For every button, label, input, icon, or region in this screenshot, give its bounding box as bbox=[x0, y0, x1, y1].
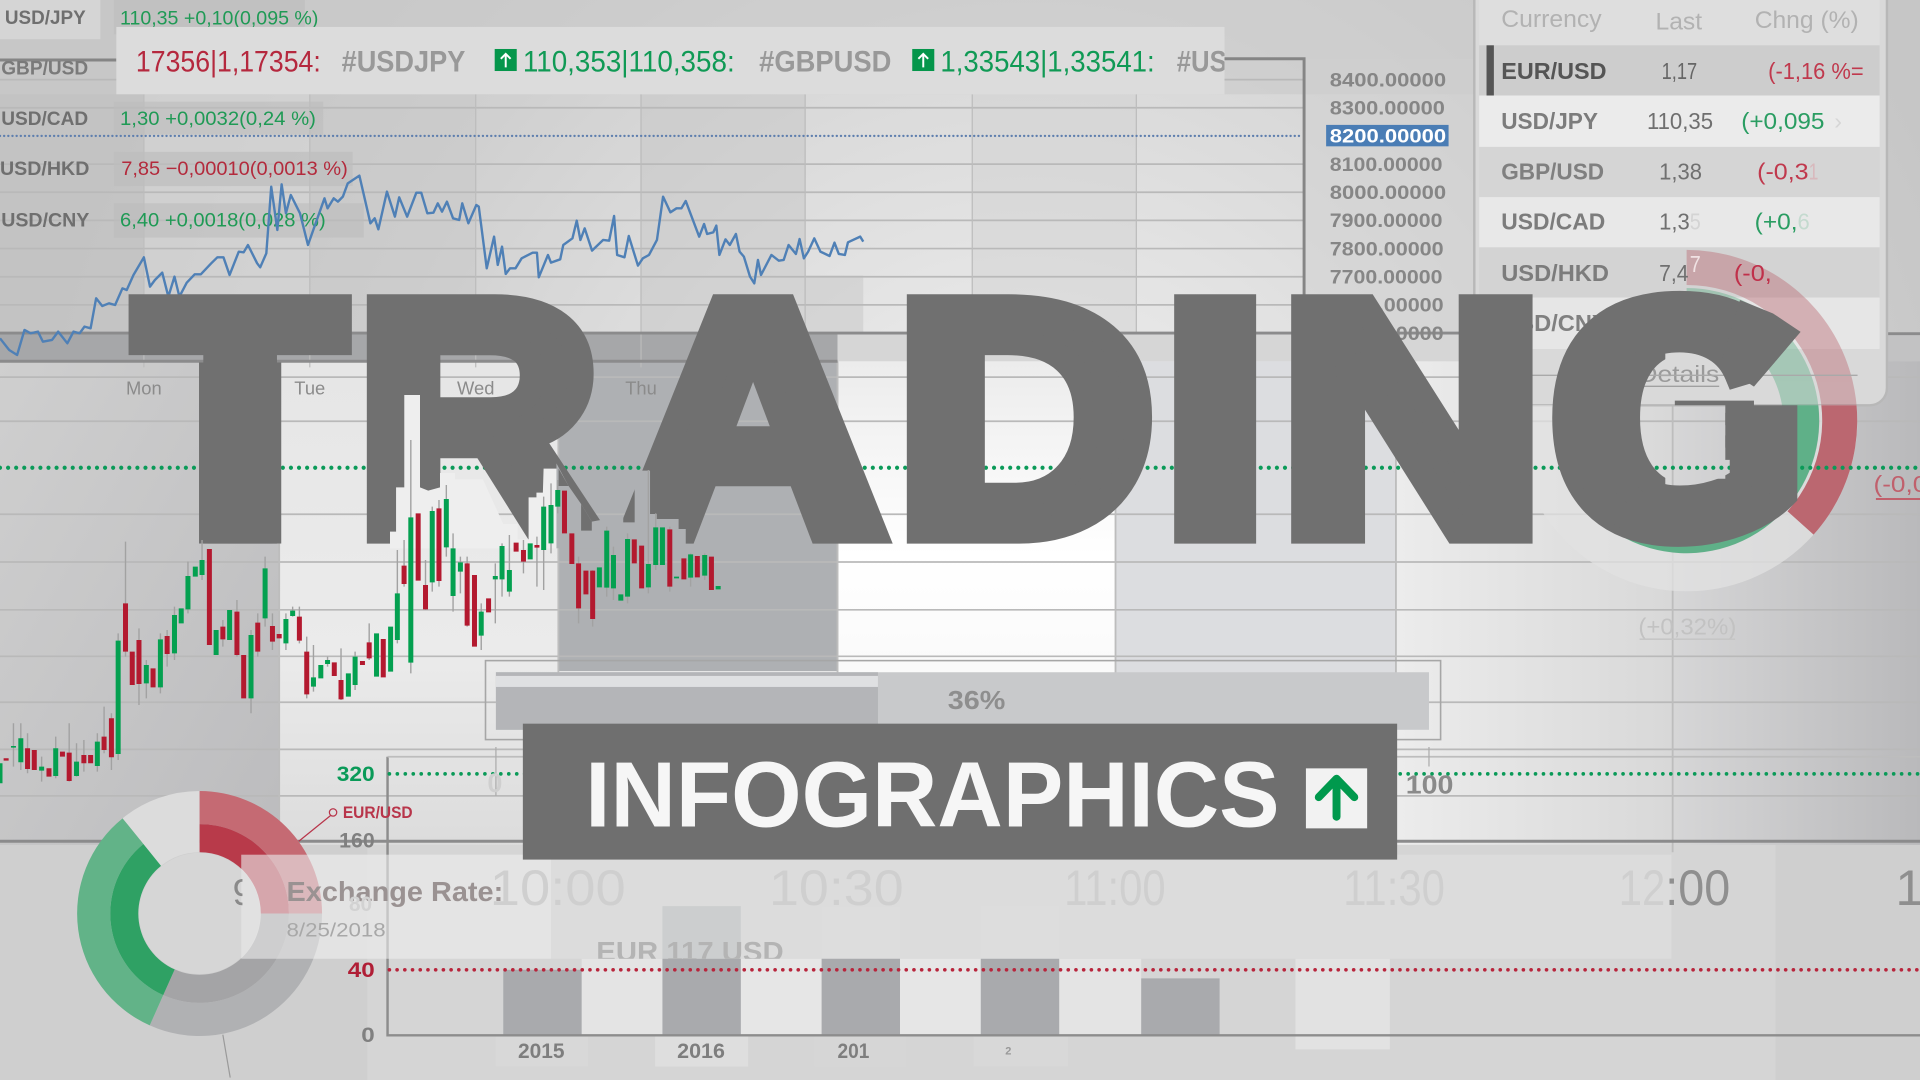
ticker strip: #USDJPY bbox=[342, 46, 466, 79]
title: TRADING: G bbox=[1551, 236, 1805, 601]
left donut chart bbox=[77, 791, 322, 1078]
ticker strip: 17356|1,17354: bbox=[136, 46, 321, 79]
currency rows left: USD/JPY bbox=[5, 7, 86, 29]
bar chart: 201 bbox=[838, 1040, 869, 1063]
subtitle banner: INFOGRAPHICS bbox=[523, 724, 1397, 860]
donut callout: EUR/USD: EUR/USD bbox=[343, 803, 413, 822]
blue price line chart bbox=[0, 176, 863, 355]
currency table text: EUR/USD bbox=[1501, 58, 1607, 84]
currency table text: 7,4 bbox=[1659, 260, 1689, 286]
currency table text: 7 bbox=[1690, 251, 1701, 277]
progress bar: 36% bbox=[948, 687, 1005, 715]
currency rows left: 6,40 +0,0018(0,028 %) bbox=[120, 210, 326, 232]
currency rows left: 7,85 −0,00010(0,0013 %) bbox=[121, 158, 348, 180]
currency rows left: USD/CAD bbox=[1, 108, 88, 130]
currency table text: (+0,095 bbox=[1741, 108, 1824, 134]
price axis labels: 8100.00000 bbox=[1330, 154, 1443, 176]
candle halo cut-out bbox=[390, 395, 686, 548]
donut part below the table panel bbox=[1532, 405, 1858, 591]
currency rows left: USD/CNY bbox=[1, 210, 89, 232]
ticker strip: #USD bbox=[1177, 46, 1245, 79]
y axis labels bbox=[337, 763, 1453, 1047]
chart axes bbox=[388, 747, 1920, 1035]
title: TRADING: G bbox=[1567, 236, 1821, 601]
progress bar bbox=[486, 661, 1441, 740]
y axis labels: 0 bbox=[361, 1024, 375, 1047]
ticker strip bbox=[116, 27, 1245, 94]
exchange rate panel: 80 bbox=[349, 893, 372, 916]
price axis labels: 7500.00000 bbox=[1330, 323, 1444, 345]
ticker strip: 110,353|110,358: bbox=[523, 46, 735, 79]
time axis labels: 10:30 bbox=[769, 860, 904, 916]
currency rows left: 1,30 +0,0032(0,24 %) bbox=[120, 108, 316, 130]
currency table text: 110,35 bbox=[1647, 108, 1713, 134]
price axis labels: 7900.00000 bbox=[1330, 210, 1443, 232]
bar chart bbox=[496, 906, 1390, 1067]
currency table text: Currency bbox=[1501, 6, 1602, 33]
currency table panel background bbox=[1474, 0, 1887, 405]
currency rows left: GBP/USD bbox=[1, 58, 88, 80]
time axis labels: 11:00 bbox=[1064, 860, 1166, 916]
ticker strip: #GBPUSD bbox=[759, 46, 891, 79]
currency table text: 6 bbox=[1798, 209, 1810, 235]
currency rows left: USD/HKD bbox=[0, 158, 89, 180]
currency table text: USD/HKD bbox=[1501, 260, 1609, 286]
time axis labels: 10:00 bbox=[490, 860, 626, 916]
currency table text: 1,38 bbox=[1659, 158, 1702, 184]
bar chart: 2 bbox=[1005, 1045, 1011, 1057]
y axis labels: 320 bbox=[337, 763, 375, 786]
exchange rate panel: 8/25/2018 bbox=[287, 920, 386, 942]
candlestick chart bbox=[0, 440, 718, 783]
title: TRADING: R bbox=[357, 236, 599, 601]
currency table text: (-0,3 bbox=[1757, 158, 1809, 184]
title: TRADING: A bbox=[623, 236, 883, 601]
dotted blue level line bbox=[0, 135, 1300, 137]
currency table text: Details bbox=[1638, 361, 1719, 387]
price axis labels: 8200.00000 bbox=[1330, 126, 1446, 148]
title: TRADING: T bbox=[137, 237, 343, 601]
exchange rate panel bbox=[233, 855, 784, 967]
currency table text: 1,3 bbox=[1659, 209, 1690, 235]
icon: green up arrow bbox=[1306, 768, 1367, 828]
title: TRADING: I bbox=[1163, 237, 1267, 601]
title: TRADING: T bbox=[133, 237, 339, 601]
G upper arm terminal bbox=[1720, 300, 1801, 387]
currency table text: USD/JPY bbox=[1501, 108, 1598, 134]
currency table text: GBP/USD bbox=[1501, 158, 1604, 184]
title: TRADING: T bbox=[142, 237, 347, 601]
y axis labels: 0 bbox=[487, 768, 502, 798]
price axis labels: 7800.00000 bbox=[1330, 238, 1444, 260]
time axis labels: 12 bbox=[1619, 860, 1665, 916]
currency rows left: 110,35 +0,10(0,095 %) bbox=[120, 7, 318, 29]
donut callout: EUR/USD bbox=[299, 803, 413, 841]
price axis labels: 7600.00000 bbox=[1330, 295, 1444, 317]
bar chart: 2016 bbox=[677, 1040, 725, 1063]
dotted green level line bbox=[0, 466, 1920, 469]
currency table text bbox=[1501, 6, 1864, 387]
ticker strip: 1,33543|1,33541: bbox=[940, 46, 1155, 79]
currency table text: 5 bbox=[1690, 209, 1701, 235]
currency table text: USD/CNY bbox=[1501, 310, 1608, 336]
price axis labels: 8400.00000 bbox=[1330, 69, 1446, 91]
side change labels: (-0,0 bbox=[1873, 471, 1920, 497]
time axis labels bbox=[490, 860, 1920, 916]
bar chart: 2015 bbox=[518, 1040, 564, 1063]
donut part under the table panel bbox=[1686, 250, 1856, 406]
exchange rate panel: 9 bbox=[233, 872, 253, 913]
title: TRADING: D bbox=[896, 236, 1154, 601]
currency table text: Chng (%) bbox=[1755, 7, 1859, 34]
chart grid lines bbox=[0, 80, 1920, 852]
price axis labels: 8000.00000 bbox=[1330, 182, 1446, 204]
currency table text: Last bbox=[1656, 8, 1702, 35]
time axis labels: :00 bbox=[1665, 860, 1730, 916]
price axis labels: 8300.00000 bbox=[1330, 97, 1445, 119]
time axis labels: 11:30 bbox=[1343, 860, 1445, 916]
currency table text: (-1,16 %= bbox=[1768, 58, 1864, 84]
weekday axis labels: Thu bbox=[625, 377, 657, 398]
currency rows left bbox=[0, 0, 364, 238]
side change labels: (+0,32%) bbox=[1638, 613, 1736, 639]
weekday axis labels: Tue bbox=[294, 377, 325, 398]
title: TRADING: N bbox=[1280, 237, 1543, 601]
weekday axis labels: Wed bbox=[457, 377, 494, 398]
y axis labels: 160 bbox=[339, 829, 375, 852]
price axis labels bbox=[1326, 69, 1449, 345]
exchange rate panel: Exchange Rate: bbox=[287, 876, 503, 907]
y axis labels: 40 bbox=[348, 959, 375, 982]
currency table text: 1,17 bbox=[1662, 58, 1697, 84]
currency table text: USD/CAD bbox=[1501, 209, 1605, 235]
currency table text: (-0, bbox=[1734, 260, 1772, 286]
y axis labels: 100 bbox=[1406, 771, 1453, 799]
dark frame lines bbox=[0, 59, 1920, 841]
price axis labels: 7700.00000 bbox=[1330, 266, 1443, 288]
weekday axis labels: Mon bbox=[126, 377, 162, 398]
currency table text: 1 bbox=[1809, 158, 1818, 184]
right donut chart bbox=[1535, 250, 1857, 572]
subtitle banner: INFOGRAPHICS: INFOGRAPHICS bbox=[585, 743, 1280, 847]
time labels band bbox=[241, 855, 1671, 959]
currency table text: › bbox=[1834, 108, 1842, 134]
title: TRADING bbox=[128, 290, 1798, 547]
exchange rate panel: EUR 117 USD bbox=[596, 936, 784, 967]
side change labels bbox=[1638, 471, 1920, 639]
currency table text: (+0, bbox=[1755, 209, 1798, 235]
weekday axis labels bbox=[126, 377, 657, 398]
